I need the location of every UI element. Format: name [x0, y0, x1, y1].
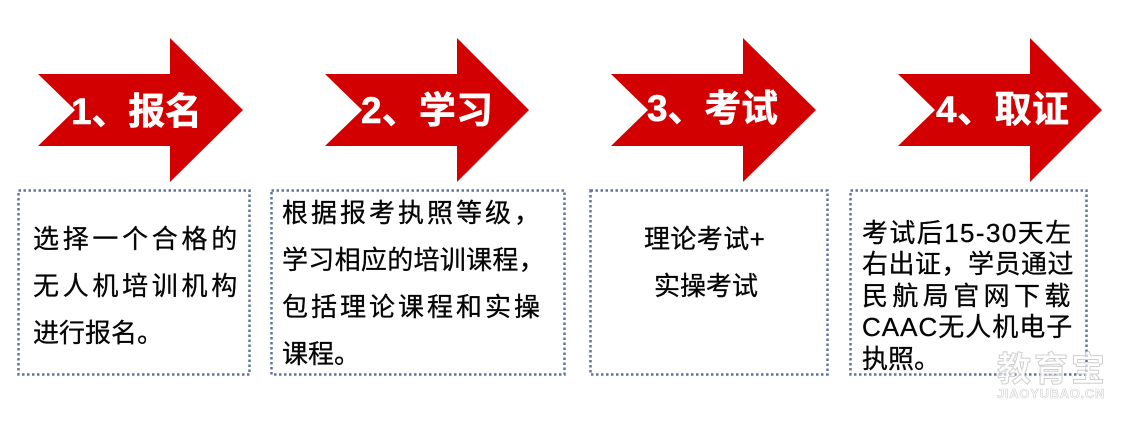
text block: step 2: 包括理论课程和实操	[282, 292, 543, 322]
text block: step 1: 进行报名。	[33, 318, 163, 348]
text block: step 4: 考试后15-30天左	[862, 218, 1072, 248]
step 3 arrow	[611, 38, 816, 182]
text block: step 3: 实操考试	[654, 271, 758, 301]
panel: step 2 description	[272, 190, 564, 374]
text block: step 1	[33, 224, 241, 348]
text block: step 4	[862, 218, 1075, 374]
text block: step 1: 无人机培训机构	[33, 271, 241, 301]
panel: step 4 description	[850, 190, 1086, 374]
step 4 heading: 4、取证	[936, 89, 1069, 130]
step 2 arrow	[325, 38, 529, 182]
step 1 arrow	[38, 38, 243, 182]
watermark: JIAOYUBAO.CN	[997, 386, 1105, 401]
step 3 heading: 3、考试	[647, 88, 778, 129]
panel: step 3 description	[590, 190, 828, 374]
step 2 heading: 2、学习	[361, 90, 493, 131]
watermark: 教育宝	[997, 351, 1108, 389]
text block: step 3	[644, 224, 765, 301]
text block: step 2: 学习相应的培训课程，	[282, 245, 545, 275]
text block: step 2: 课程。	[282, 339, 360, 369]
text block: step 3: 理论考试+	[644, 224, 765, 254]
text block: step 4: 民航局官网下载	[862, 281, 1075, 311]
step 1 heading: 1、报名	[71, 91, 202, 132]
step 4 arrow	[898, 38, 1102, 182]
text block: step 1: 选择一个合格的	[33, 224, 241, 254]
text block: step 4: 右出证，学员通过	[862, 249, 1074, 279]
text block: step 4: 执照。	[862, 344, 940, 374]
text block: step 2	[282, 198, 545, 369]
text block: step 2: 根据报考执照等级，	[282, 198, 543, 228]
text block: step 4: CAAC无人机电子	[862, 312, 1073, 342]
panel: step 1 description	[18, 190, 250, 374]
